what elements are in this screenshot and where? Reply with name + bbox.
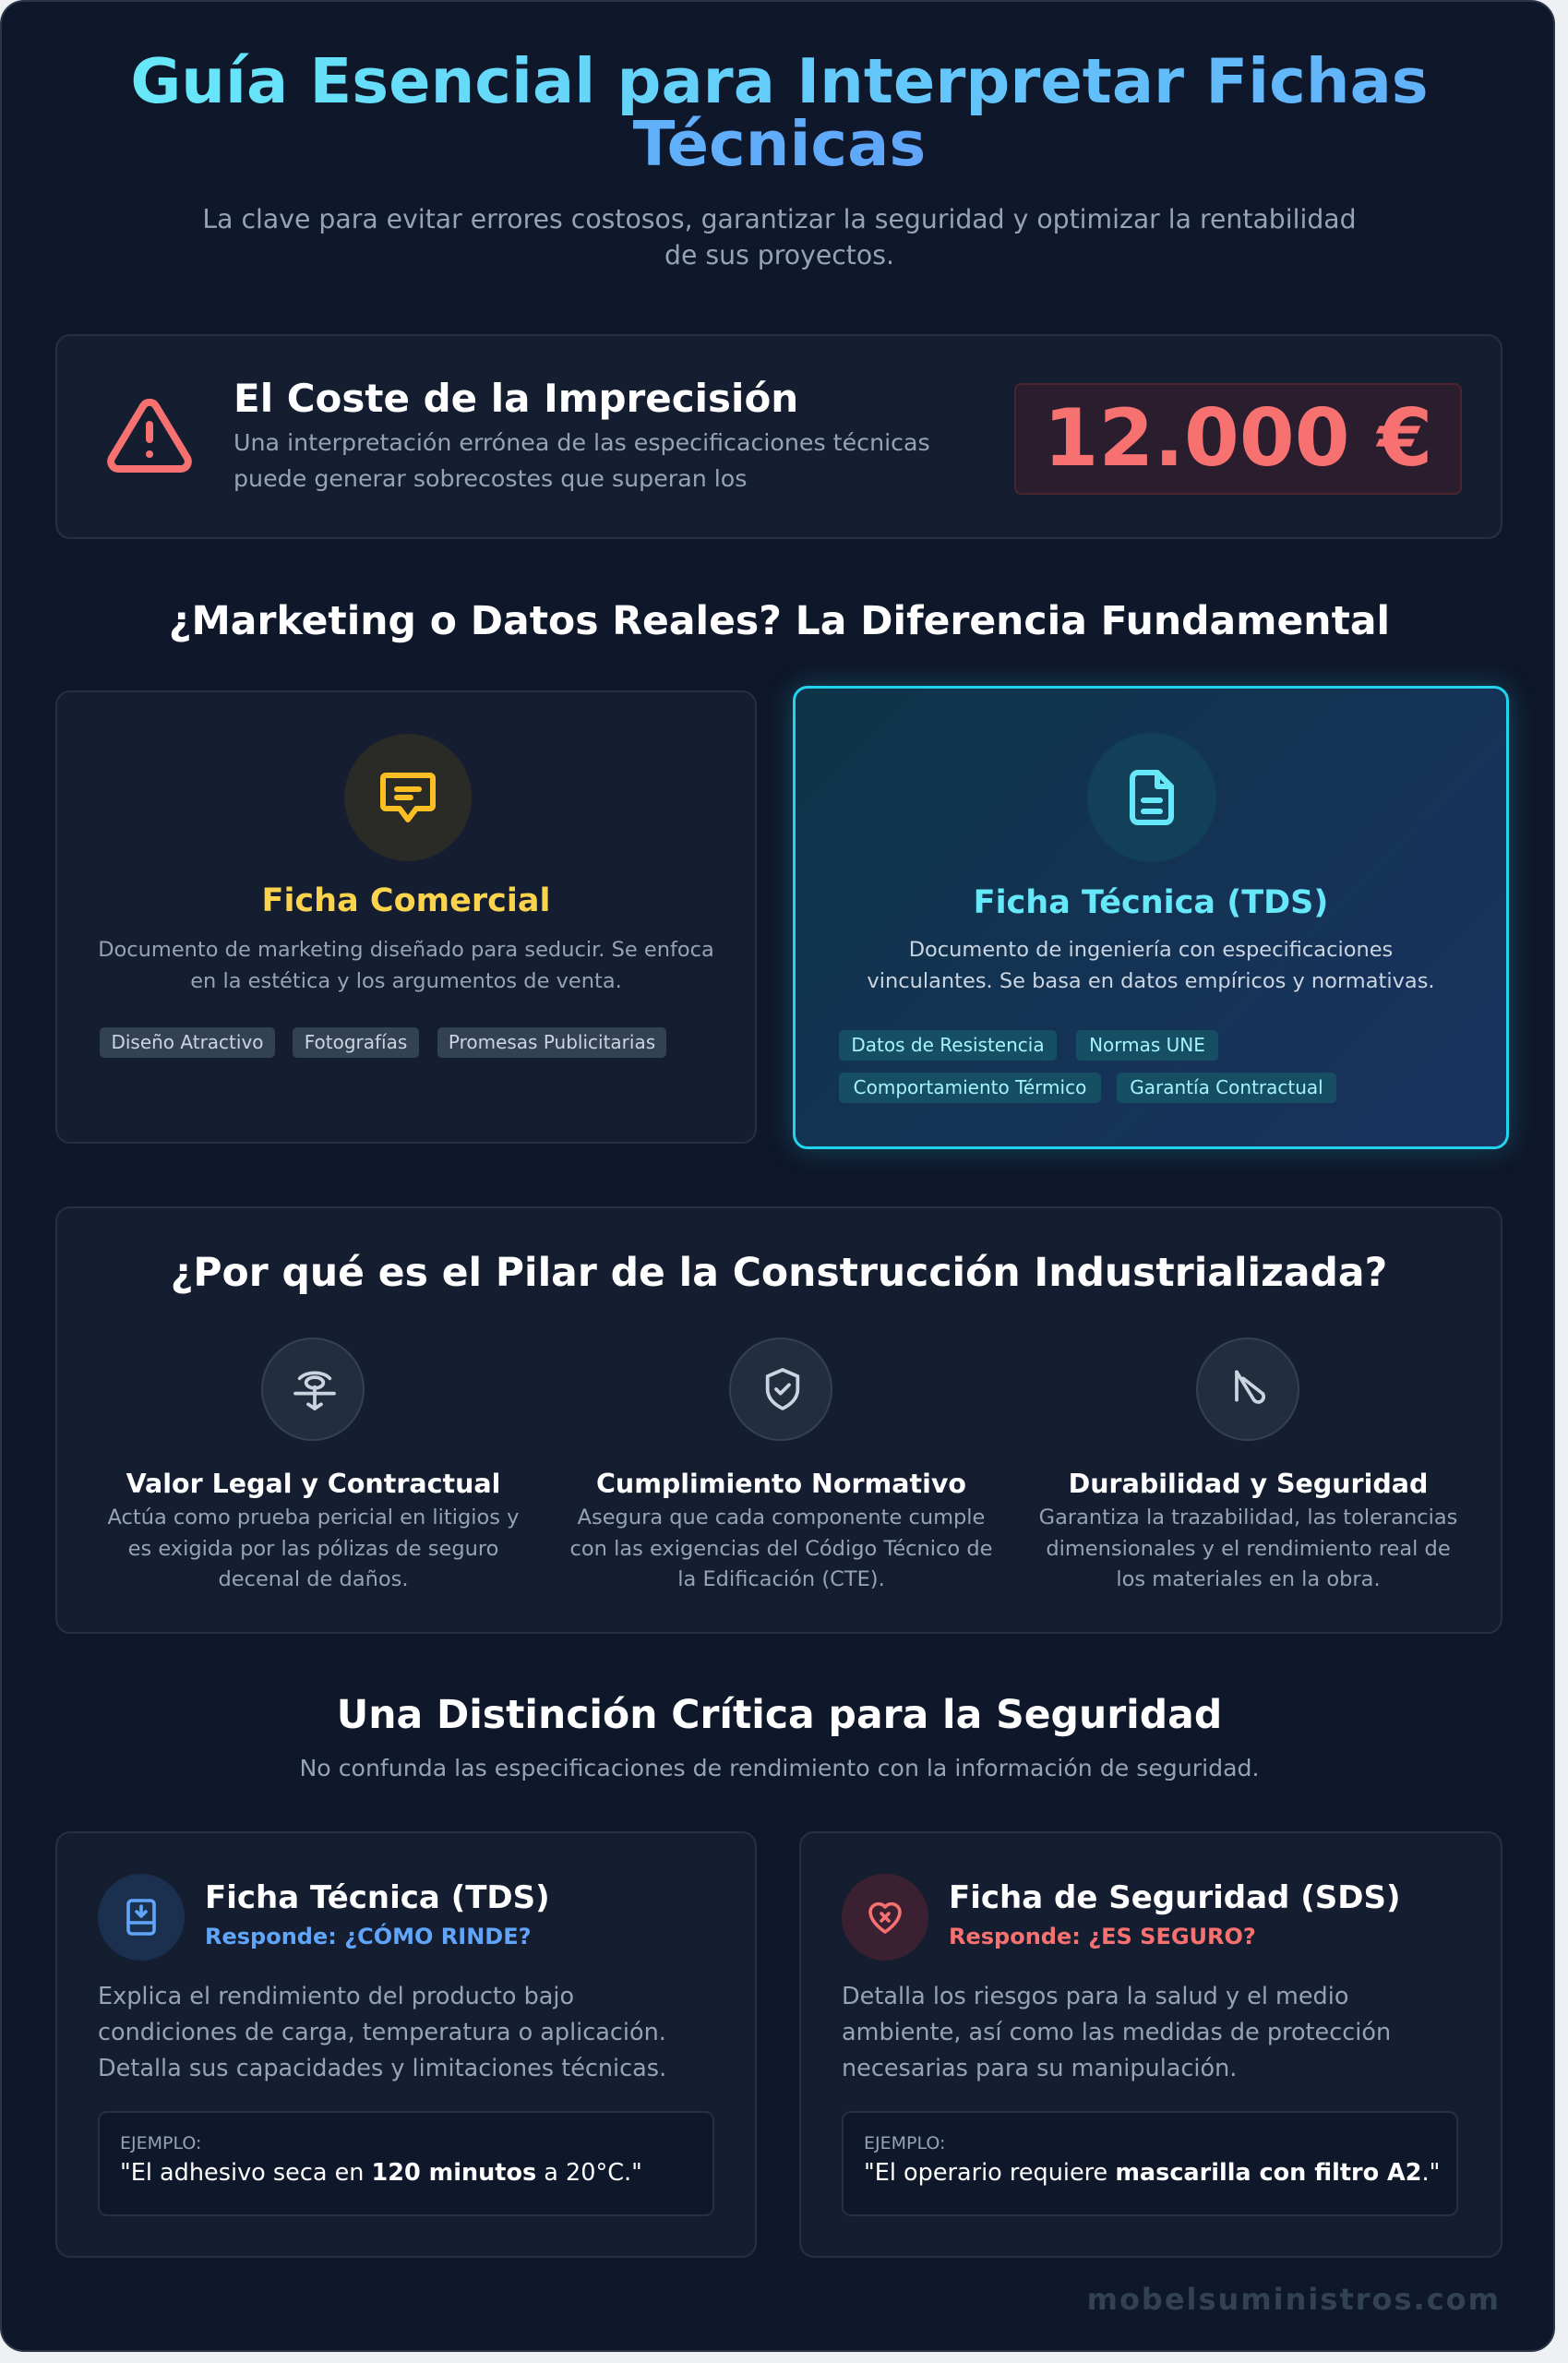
text: legal title: Valor Legal y Contractual <box>126 1469 500 1499</box>
text: Documento de marketing diseñado para seducir. Se enfoca en la estética y los argumentos de venta. <box>98 938 714 993</box>
text: cost description: Una interpretación errónea de las especificaciones técnicas puede generar sobrecostes que superan los <box>233 429 930 492</box>
tags: Comportamiento Térmico <box>854 1076 1086 1098</box>
panel: TDS <box>55 1831 757 2258</box>
icon: heart <box>842 1874 928 1961</box>
text: durability desc: Garantiza la trazabilidad, las tolerancias dimensionales y el rendimiento real de los materiales en la obra. <box>1039 1505 1457 1591</box>
text: body: Detalla los riesgos para la salud y el medio ambiente, así como las medidas de protección necesarias para su manipulación. <box>842 1983 1391 2082</box>
icon: tool <box>1196 1337 1299 1441</box>
tags: Promesas Publicitarias <box>449 1031 655 1053</box>
subtitle: La clave para evitar errores costosos, garantizar la seguridad y optimizar la rentabilidad de sus proyectos. <box>202 204 1357 270</box>
text: durability title: Durabilidad y Seguridad <box>1069 1469 1428 1499</box>
example box <box>98 2111 714 2216</box>
icon: document <box>1087 733 1216 862</box>
text: Documento de ingeniería con especificaciones vinculantes. Se basa en datos empíricos y normativas. <box>867 938 1435 993</box>
text: body: Explica el rendimiento del producto bajo condiciones de carga, temperatura o aplicación. Detalla sus capacidades y limitaciones técnicas. <box>98 1983 666 2082</box>
example box: "El operario requiere mascarilla con filtro A2." <box>864 2159 1440 2187</box>
example box <box>842 2111 1458 2216</box>
tags <box>839 1030 1336 1103</box>
text: normative desc: Asegura que cada componente cumple con las exigencias del Código Técnico de la Edificación (CTE). <box>570 1505 992 1591</box>
heading: pillar: ¿Por qué es el Pilar de la Construcción Industrializada? <box>171 1251 1387 1296</box>
panel: ficha técnica highlighted <box>793 686 1509 1149</box>
title: Guía Esencial para Interpretar Fichas <box>130 45 1429 117</box>
heading: cost: El Coste de la Imprecisión <box>233 376 798 421</box>
heading: TDS: Ficha Técnica (TDS) <box>205 1879 550 1916</box>
title <box>130 45 1429 180</box>
icon: scale <box>261 1337 365 1441</box>
text: legal desc: Actúa como prueba pericial en litigios y es exigida por las pólizas de seguro decenal de daños. <box>107 1505 519 1591</box>
footer: website: mobelsuministros.com <box>1087 2282 1501 2317</box>
icon: warning triangle <box>107 399 192 473</box>
text: answer: Responde: ¿CÓMO RINDE? <box>205 1924 532 1949</box>
tags: Fotografías <box>305 1031 407 1053</box>
text: answer: Responde: ¿ES SEGURO? <box>949 1924 1256 1949</box>
pillar: durability <box>1039 1337 1457 1591</box>
icon: download doc <box>98 1874 185 1961</box>
panel: pillars <box>55 1206 1502 1634</box>
heading: critical distinction: Una Distinción Crítica para la Seguridad <box>337 1693 1222 1738</box>
tags <box>100 1027 666 1058</box>
heading: SDS: Ficha de Seguridad (SDS) <box>949 1879 1401 1916</box>
example box: EJEMPLO: <box>120 2133 201 2153</box>
title: Técnicas <box>633 108 926 180</box>
heading: marketing vs data: ¿Marketing o Datos Reales? La Diferencia Fundamental <box>169 599 1390 644</box>
heading: ficha técnica: Ficha Técnica (TDS) <box>974 884 1328 921</box>
icon: shield <box>729 1337 832 1441</box>
tags: Diseño Atractivo <box>111 1031 264 1053</box>
example box: EJEMPLO: <box>864 2133 945 2153</box>
tags: Datos de Resistencia <box>851 1034 1045 1056</box>
heading: ficha comercial: Ficha Comercial <box>262 882 550 919</box>
pillar: normative <box>570 1337 992 1591</box>
panel: ficha comercial <box>55 690 757 1144</box>
panel: SDS <box>799 1831 1502 2258</box>
subheading: No confunda las especificaciones de rendimiento con la información de seguridad. <box>299 1755 1260 1781</box>
tags: Garantía Contractual <box>1130 1076 1323 1098</box>
pillar: legal <box>107 1337 519 1591</box>
text: normative title: Cumplimiento Normativo <box>596 1469 966 1499</box>
callout: 12.000 €: 12.000 € <box>1044 392 1432 485</box>
tags: Normas UNE <box>1089 1034 1205 1056</box>
icon: chat bubble <box>344 734 472 861</box>
example box: "El adhesivo seca en 120 minutos a 20°C." <box>120 2159 642 2187</box>
panel: cost of imprecision <box>55 334 1502 539</box>
